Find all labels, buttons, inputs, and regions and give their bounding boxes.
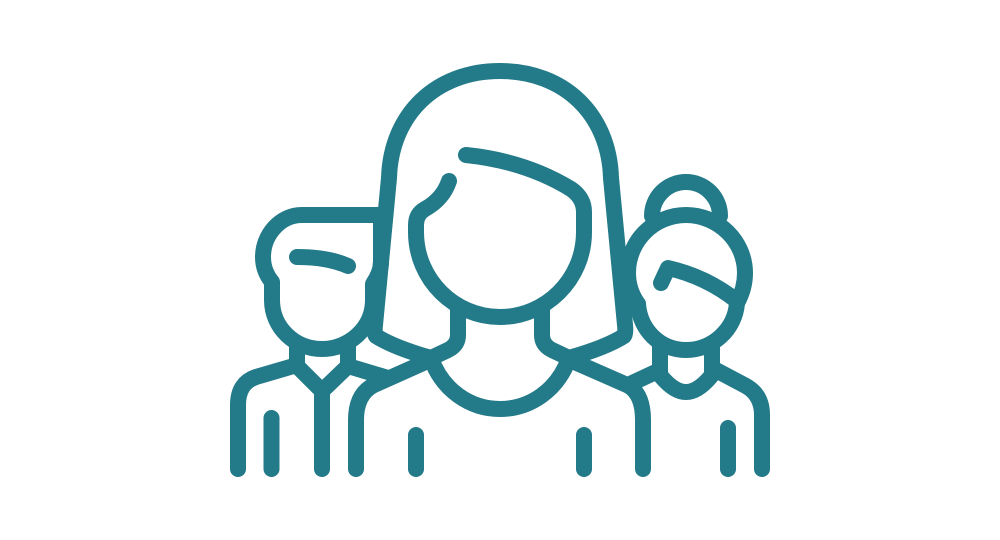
woman face and fringe (416, 155, 584, 317)
woman right shoulder and arm (570, 360, 643, 469)
woman left arm stripe (408, 435, 424, 469)
icon: older woman on the right (628, 182, 762, 469)
man right shoulder (348, 366, 388, 378)
hair bun (652, 182, 720, 216)
neck and neckline (660, 345, 712, 392)
woman neck left (431, 307, 458, 358)
right shoulder and arm (712, 368, 762, 469)
man arm stripe (264, 418, 280, 469)
icon: man on the left (238, 215, 388, 469)
icon: woman in the centre (356, 71, 643, 469)
arm stripe (720, 428, 736, 469)
woman right arm stripe (576, 435, 592, 469)
man neck and collar (297, 345, 348, 391)
man left shoulder and arm (238, 365, 297, 469)
face outline (638, 303, 737, 350)
woman left shoulder and arm (356, 360, 430, 469)
left shoulder (628, 370, 660, 385)
woman neckline (431, 358, 569, 409)
woman hair outline (375, 71, 625, 358)
man hair and face outline (263, 215, 381, 349)
man fringe (297, 257, 348, 266)
woman neck right (542, 307, 569, 358)
hair outline (628, 215, 745, 304)
man tie line (314, 391, 330, 469)
fringe (661, 268, 737, 301)
